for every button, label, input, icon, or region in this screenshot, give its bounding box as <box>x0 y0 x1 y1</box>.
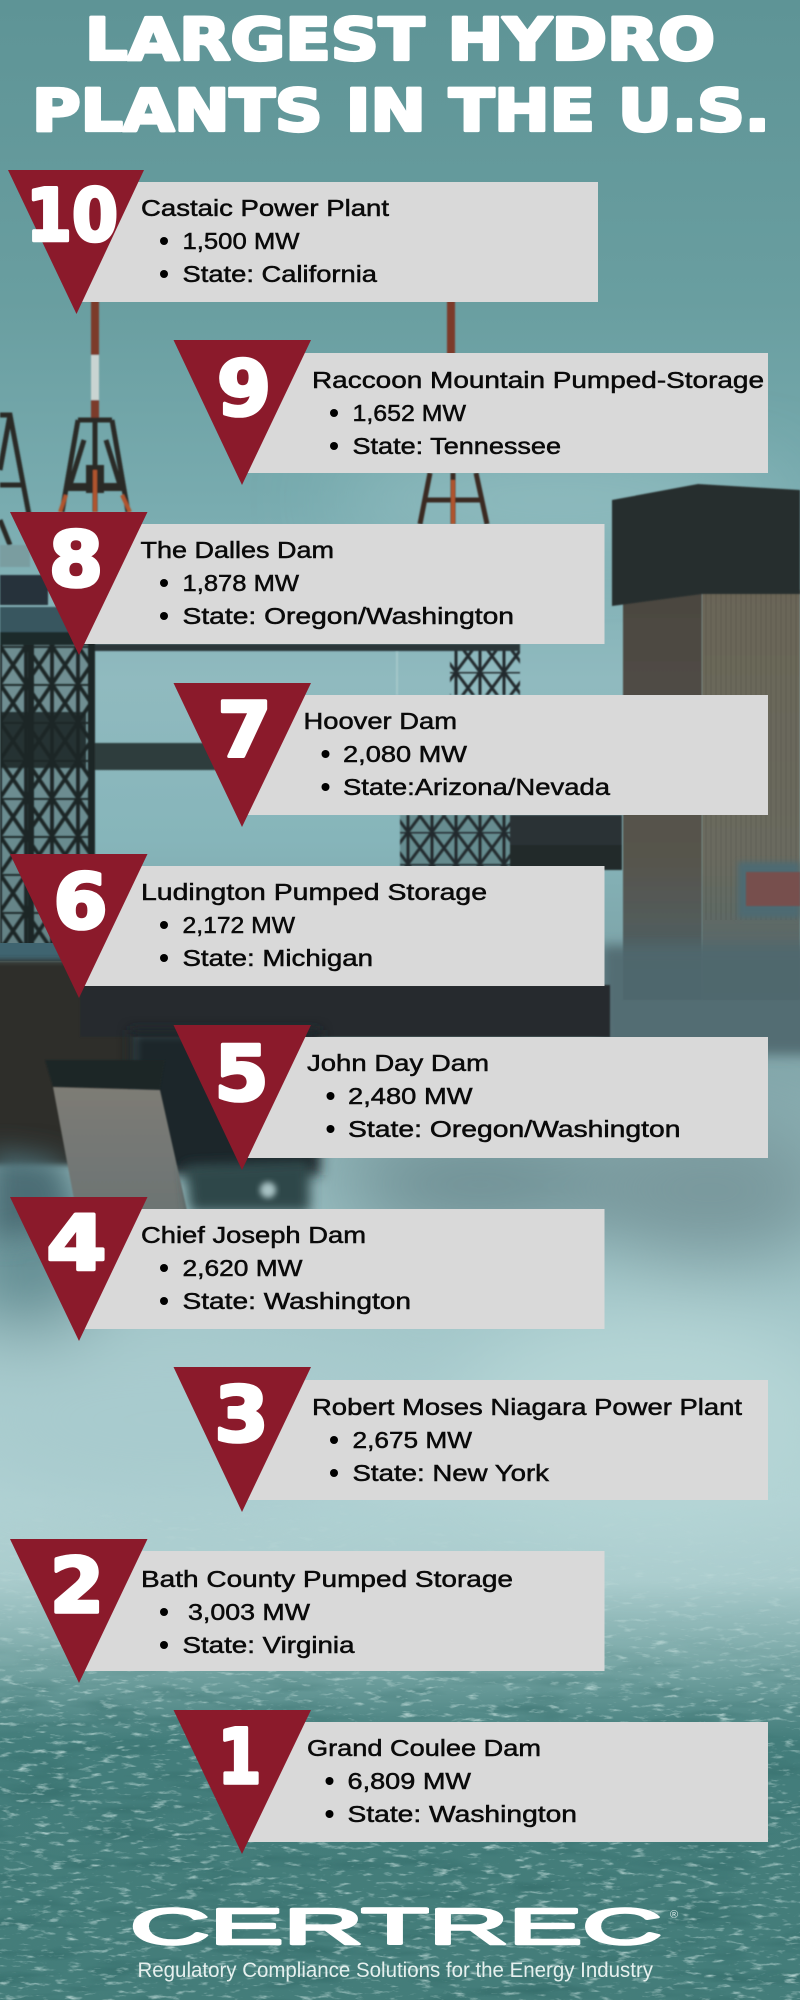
plant details <box>141 195 390 287</box>
plant details <box>312 367 764 459</box>
plant details <box>141 879 487 971</box>
title: LARGEST HYDRO <box>85 6 715 74</box>
rank triangle <box>10 854 148 998</box>
water foam texture <box>0 1574 800 2000</box>
rank triangle <box>10 512 148 655</box>
plant details: 2,620 MW <box>182 1255 303 1281</box>
plant details: Raccoon Mountain Pumped-Storage <box>312 367 764 393</box>
plant details: 2,480 MW <box>348 1083 473 1109</box>
plant details <box>304 708 610 800</box>
rank number: 9 <box>217 344 271 433</box>
info box <box>79 524 604 644</box>
info box <box>242 1722 768 1842</box>
right tower <box>450 651 520 695</box>
plant details <box>141 1566 513 1658</box>
platforms of the left tower <box>0 545 30 567</box>
plant details: Grand Coulee Dam <box>307 1735 541 1761</box>
info box <box>242 695 768 815</box>
info box <box>79 1551 604 1671</box>
panel: rank 6 Ludington Pumped Storage <box>10 854 604 998</box>
rank number: 8 <box>49 515 103 604</box>
plant details: Robert Moses Niagara Power Plant <box>312 1394 743 1420</box>
info box <box>242 353 768 473</box>
plant details: State: New York <box>352 1460 550 1486</box>
panel: rank 10 Castaic Power Plant <box>8 170 598 314</box>
plant details <box>312 1394 743 1486</box>
plant details <box>307 1050 680 1142</box>
plant details: State: Oregon/Washington <box>348 1116 680 1142</box>
rank triangle <box>174 1025 311 1170</box>
plant details: State: Washington <box>182 1288 411 1314</box>
rank triangle <box>174 1710 311 1854</box>
plant details <box>141 1222 411 1314</box>
plant details: State: California <box>182 261 377 287</box>
plant details: State: Tennessee <box>352 433 561 459</box>
building <box>600 484 800 1055</box>
info box <box>76 182 598 302</box>
rank number: 7 <box>218 686 272 774</box>
plant details: State: Michigan <box>182 945 373 971</box>
rank triangle <box>8 170 144 314</box>
mast right <box>447 300 455 360</box>
plant details: The Dalles Dam <box>140 537 334 563</box>
registered mark: ® <box>670 1909 678 1921</box>
clouds and mist <box>0 472 800 1530</box>
plant details: Bath County Pumped Storage <box>141 1566 513 1592</box>
plant details <box>307 1735 577 1827</box>
title <box>32 6 770 144</box>
rank number: 1 <box>218 1712 262 1801</box>
plant details: Ludington Pumped Storage <box>141 879 487 905</box>
rank number: 3 <box>214 1370 268 1459</box>
panel: rank 9 Raccoon Mountain Pumped-Storage <box>174 340 768 485</box>
plant details: State: Washington <box>348 1801 577 1827</box>
info box <box>79 866 604 986</box>
info box <box>242 1037 768 1158</box>
panel: rank 4 Chief Joseph Dam <box>10 1197 604 1341</box>
plant details: 2,172 MW <box>182 912 295 938</box>
plant details <box>140 537 514 629</box>
dam base and concrete pier <box>0 943 610 1240</box>
mast left <box>91 300 99 420</box>
rank number: 5 <box>214 1029 268 1118</box>
wordmark: CERTREC <box>130 1898 662 1955</box>
panel: rank 7 Hoover Dam <box>174 683 768 827</box>
pipe <box>396 652 398 695</box>
panel: rank 2 Bath County Pumped Storage <box>10 1539 604 1683</box>
panel: rank 5 John Day Dam <box>174 1025 768 1170</box>
plant details: Castaic Power Plant <box>141 195 390 221</box>
info box <box>79 1209 604 1329</box>
plant details: 1,652 MW <box>352 400 466 426</box>
rank triangle <box>174 340 311 485</box>
top girder <box>95 644 520 651</box>
tagline: Regulatory Compliance Solutions for the Energy Industry <box>138 1959 653 1982</box>
panel: rank 1 Grand Coulee Dam <box>174 1710 768 1854</box>
panel: rank 3 Robert Moses Niagara Power Plant <box>174 1367 768 1512</box>
plant details: 3,003 MW <box>188 1599 310 1625</box>
plant details: 6,809 MW <box>348 1768 471 1794</box>
rank number: 2 <box>50 1541 104 1630</box>
plant details: State: Virginia <box>182 1632 355 1658</box>
plant details: State:Arizona/Nevada <box>343 774 610 800</box>
rank triangle <box>10 1539 148 1683</box>
plant details: 2,080 MW <box>343 741 467 767</box>
edge crane <box>0 415 50 590</box>
left tower <box>0 645 95 945</box>
plant details: Hoover Dam <box>304 708 457 734</box>
plant details: 1,500 MW <box>182 228 300 254</box>
logo: Certrec wordmark and tagline <box>130 1898 678 1982</box>
plant details: State: Oregon/Washington <box>182 603 514 629</box>
plant details: 2,675 MW <box>352 1427 472 1453</box>
info box <box>242 1380 768 1500</box>
panel: rank 8 The Dalles Dam <box>10 512 604 655</box>
cranes and lattice towers <box>0 300 622 945</box>
plant details: 1,878 MW <box>182 570 299 596</box>
title: PLANTS IN THE U.S. <box>32 76 770 144</box>
plant details: John Day Dam <box>307 1050 489 1076</box>
plant details: Chief Joseph Dam <box>141 1222 366 1248</box>
rank triangle <box>174 1367 311 1512</box>
rank triangle <box>174 683 311 827</box>
rank triangle <box>10 1197 148 1341</box>
rank number: 4 <box>46 1198 106 1288</box>
rank number: 6 <box>54 857 108 946</box>
rank number: 10 <box>26 174 118 258</box>
